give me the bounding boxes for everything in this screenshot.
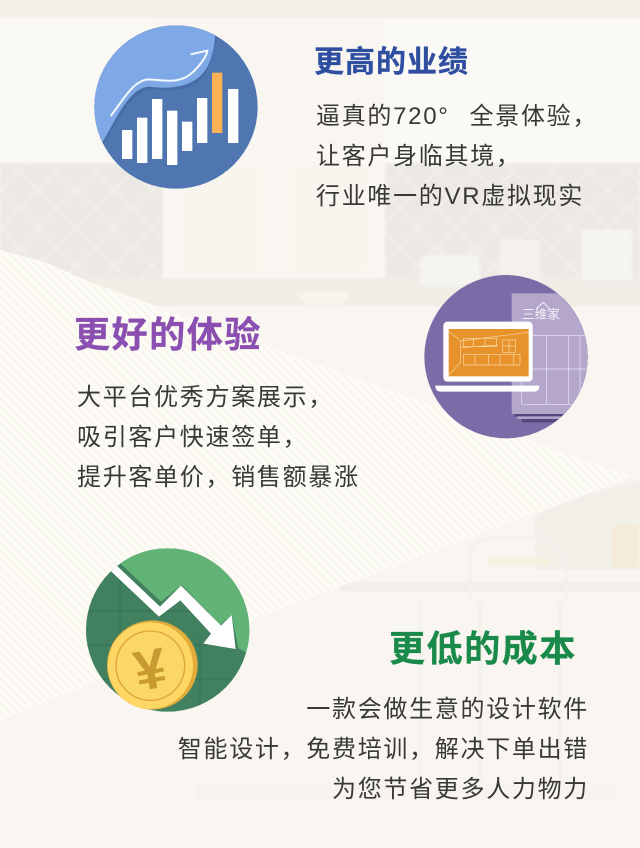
text block: lower cost xyxy=(178,696,589,803)
stripes xyxy=(0,250,632,720)
text block: lower cost: 智能设计，免费培训，解决下单出错 xyxy=(178,736,589,763)
heading: higher performance: 更高的业绩 xyxy=(314,46,469,79)
heading: better experience: 更好的体验 xyxy=(74,314,262,355)
text block: higher performance: 让客户身临其境， xyxy=(316,143,522,170)
text block: lower cost: 一款会做生意的设计软件 xyxy=(306,696,589,723)
text block: higher performance: 逼真的720° 全景体验， xyxy=(316,103,598,130)
coin xyxy=(107,620,198,710)
logo: 三维家 xyxy=(522,306,560,321)
icon: laptop and floor plan circle xyxy=(424,275,588,438)
icon: falling cost circle xyxy=(86,548,250,712)
text block: better experience: 大平台优秀方案展示， xyxy=(77,384,334,411)
icon: falling cost circle: ¥ xyxy=(129,637,172,704)
text block: better experience xyxy=(77,384,360,491)
icon: rising chart circle xyxy=(94,25,258,189)
heading: lower cost: 更低的成本 xyxy=(389,628,577,669)
text block: better experience: 提升客单价，销售额暴涨 xyxy=(77,464,360,491)
text block: higher performance: 行业唯一的VR虚拟现实 xyxy=(316,183,584,210)
text block: better experience: 吸引客户快速签单， xyxy=(77,424,308,451)
text block: lower cost: 为您节省更多人力物力 xyxy=(332,776,589,803)
text block: higher performance xyxy=(316,103,598,210)
